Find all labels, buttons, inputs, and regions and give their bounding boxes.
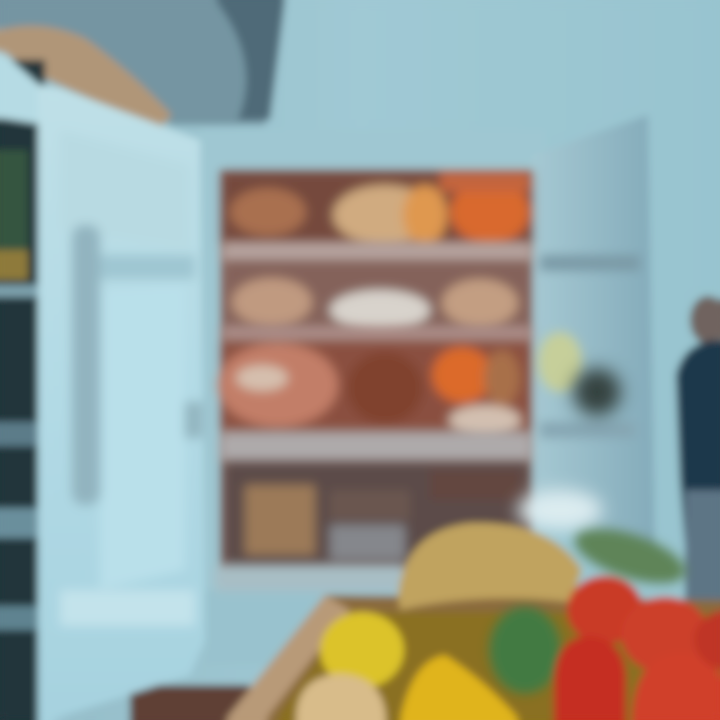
bottom shelf — [215, 565, 405, 591]
person in background — [676, 296, 720, 610]
yellow pepper — [400, 655, 520, 720]
bread loaf — [398, 523, 582, 610]
interior shelves — [215, 170, 532, 591]
bright containers in front of shelf — [518, 490, 602, 530]
tomatoes — [554, 576, 720, 720]
left open door — [38, 85, 205, 720]
ceiling hood — [0, 0, 285, 125]
door shelf items — [538, 332, 582, 392]
right open door — [532, 115, 655, 548]
wooden crate — [225, 595, 720, 720]
shelf 3 — [220, 432, 532, 462]
floor — [130, 685, 250, 720]
green leaves — [568, 517, 692, 595]
shelf 1 — [222, 242, 532, 262]
third row food — [218, 342, 530, 435]
top row food — [222, 172, 532, 245]
second row food — [225, 262, 530, 330]
potato — [296, 674, 386, 720]
bottom row food — [224, 462, 529, 567]
cardboard box on top of door — [0, 26, 172, 128]
basket of vegetables — [225, 517, 720, 720]
shelf 2 — [222, 326, 532, 342]
crate interior — [275, 612, 720, 720]
door handle — [72, 225, 100, 505]
lemon — [320, 612, 404, 688]
green pepper — [489, 606, 561, 694]
cabinet frame — [200, 130, 545, 665]
far-left dark interior — [0, 50, 45, 720]
